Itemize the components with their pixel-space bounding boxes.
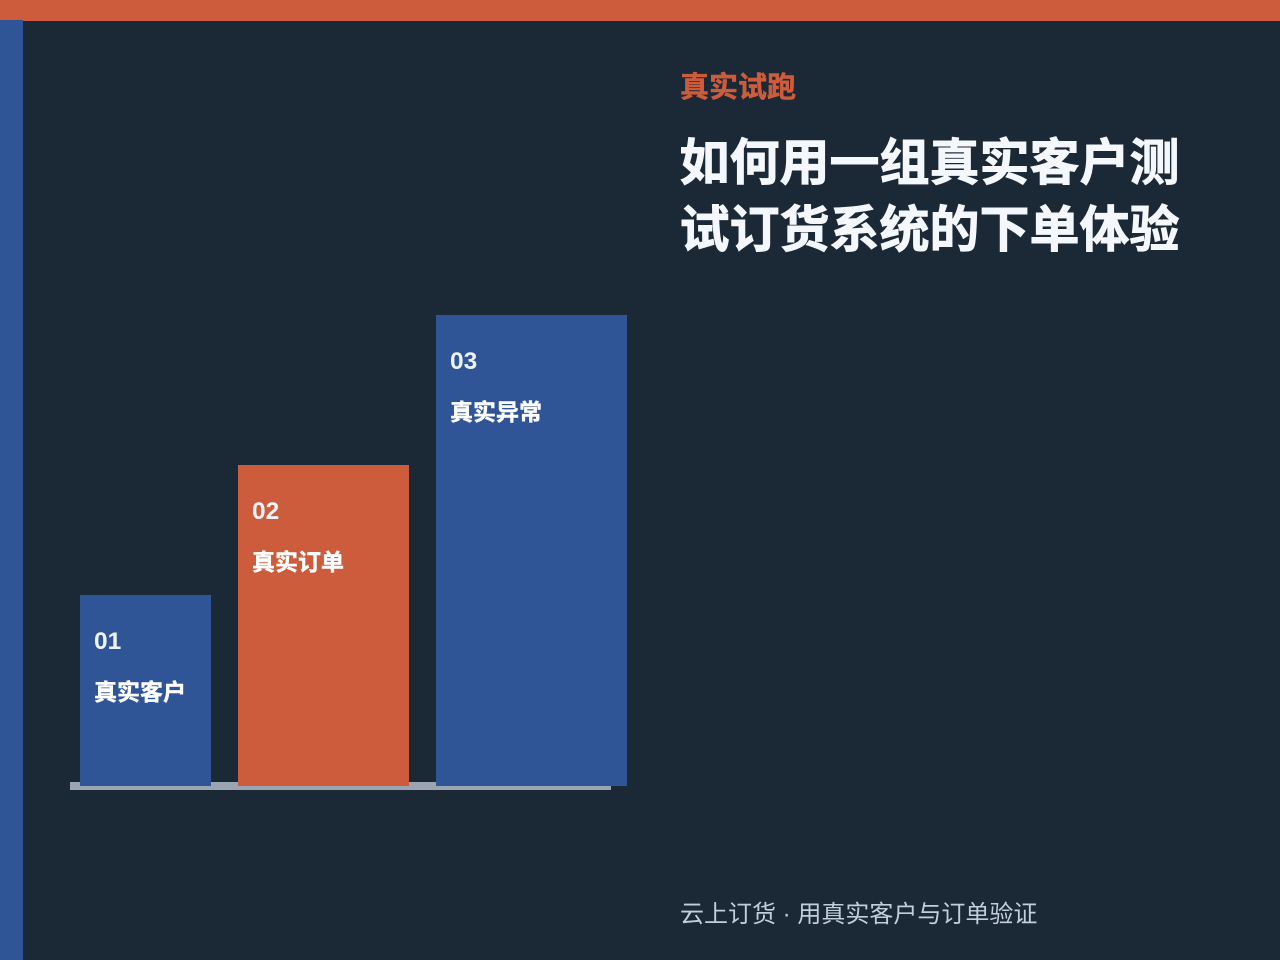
bar 03: 真实异常 [436, 315, 627, 786]
bar 03 number: 03 [450, 348, 477, 375]
title: 如何用一组真实客户测 [680, 135, 1180, 191]
eyebrow tag: 真实试跑 [680, 72, 796, 104]
bar 02 number: 02 [252, 498, 279, 525]
bar 03 label: 真实异常 [450, 399, 542, 425]
title [680, 135, 1180, 258]
top accent bar [0, 0, 1280, 21]
chart baseline [70, 782, 611, 790]
title: 试订货系统的下单体验 [680, 202, 1180, 258]
bar 01 label: 真实客户 [94, 679, 186, 705]
bar 02 label: 真实订单 [252, 549, 344, 575]
bar 02: 真实订单 [238, 465, 409, 786]
footer note: 云上订货 · 用真实客户与订单验证 [680, 901, 1037, 928]
bar 01: 真实客户 [80, 595, 211, 786]
bar 01 number: 01 [94, 628, 121, 655]
left accent bar [0, 20, 23, 960]
